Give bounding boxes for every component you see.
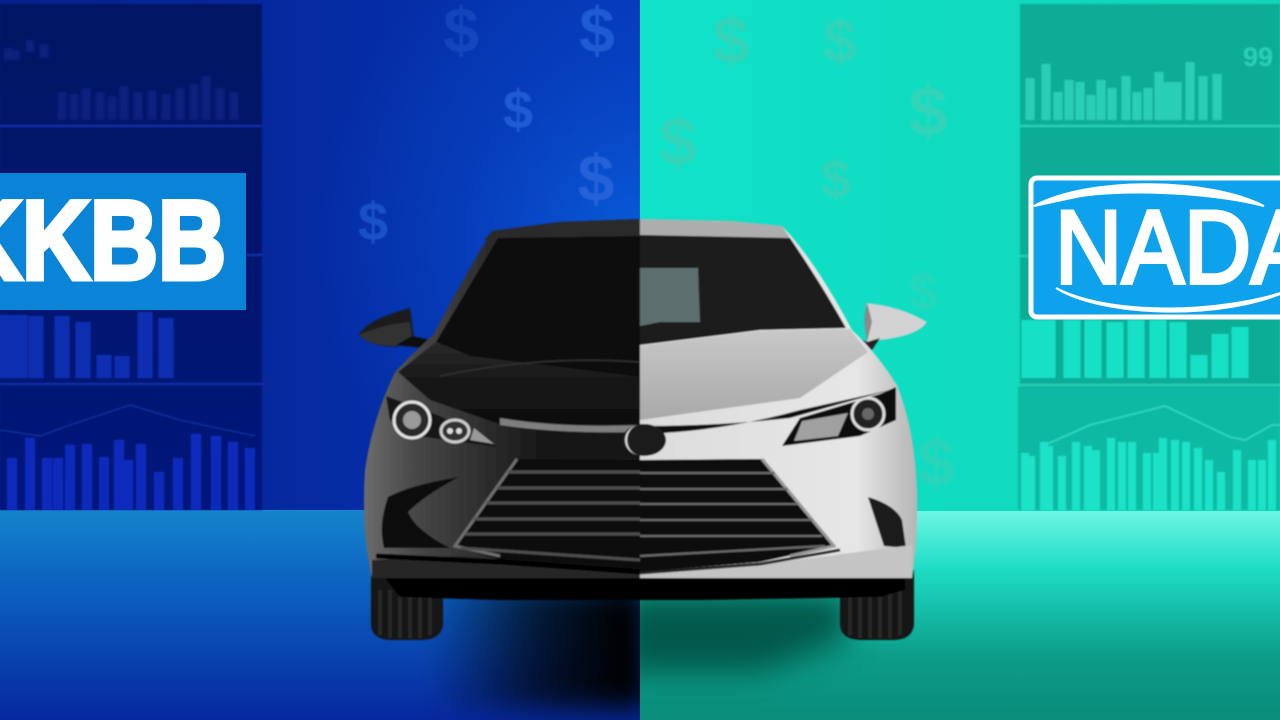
chart: lower bars and trend bbox=[1025, 406, 1280, 510]
chart: faint top bars bbox=[8, 40, 234, 120]
fog lamp: left bbox=[382, 477, 459, 548]
mirror: left bbox=[359, 308, 432, 349]
icons: teal dollar signs: $ bbox=[918, 425, 954, 499]
mirror: right bbox=[858, 302, 927, 356]
icons: teal dollar signs: $ bbox=[909, 72, 947, 150]
car shadow: teal side bbox=[620, 590, 850, 672]
icons: blue dollar signs bbox=[358, 0, 615, 252]
grille: left bbox=[455, 459, 640, 572]
panel: blue background bbox=[0, 0, 640, 511]
car: light right half bbox=[640, 219, 917, 578]
car: dark left half bbox=[364, 219, 640, 578]
icons: teal dollar signs: $ bbox=[659, 104, 697, 180]
icons: blue dollar signs: $ bbox=[578, 141, 614, 215]
icons: teal dollar signs: $ bbox=[821, 149, 851, 209]
chart: top bars bbox=[1030, 62, 1217, 120]
icons: teal dollar signs: $ bbox=[713, 3, 749, 77]
car shadow: blue side bbox=[430, 585, 650, 710]
icons: teal dollar signs: $ bbox=[909, 263, 938, 321]
chart: middle bars bbox=[1030, 320, 1240, 378]
floor: teal bbox=[640, 511, 1280, 720]
fog lamp: right bbox=[868, 497, 906, 548]
panel: blue data dashboard bbox=[0, 4, 265, 510]
car: split front view bbox=[359, 219, 927, 640]
text: top numerals: 99 bbox=[1243, 42, 1273, 72]
icons: blue dollar signs: $ bbox=[358, 192, 388, 252]
emblem bbox=[622, 424, 666, 456]
floor: blue bbox=[0, 510, 640, 720]
headlight: left bbox=[386, 396, 498, 447]
icons: blue dollar signs: $ bbox=[503, 80, 533, 140]
icons: teal dollar signs bbox=[659, 3, 954, 499]
panel: teal background bbox=[640, 0, 1280, 511]
headlight: right bbox=[782, 387, 896, 446]
icons: teal dollar signs: $ bbox=[823, 8, 857, 75]
chart: lower bars and trend bbox=[0, 405, 255, 510]
wheels bbox=[371, 570, 914, 640]
panel: teal data dashboard bbox=[1018, 4, 1280, 510]
chart: middle bars bbox=[6, 312, 166, 378]
grille: right bbox=[640, 459, 834, 572]
underbody bbox=[380, 572, 905, 600]
